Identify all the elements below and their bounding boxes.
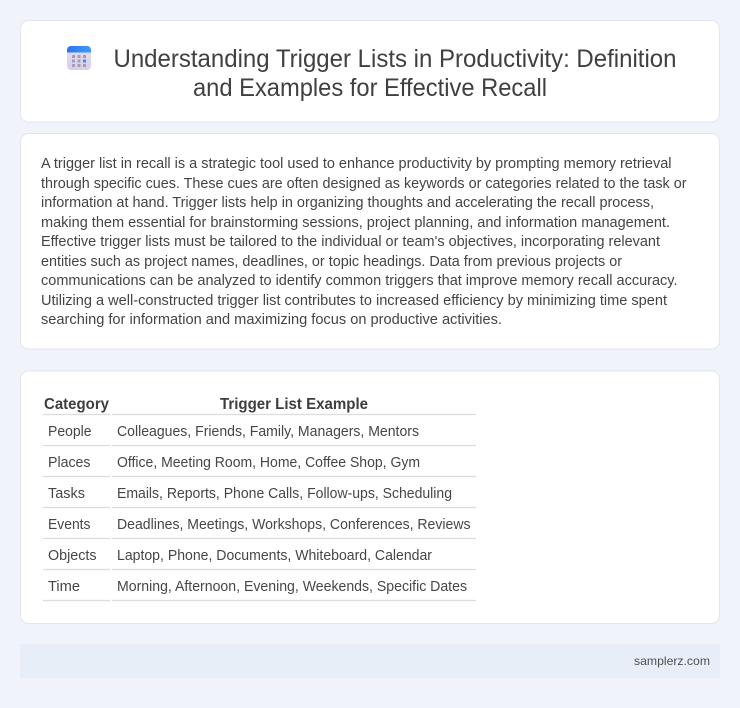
row: Tasks: Emails, Reports, Phone Calls, Follow-ups, Scheduling — [117, 486, 452, 502]
row: Places — [43, 455, 476, 476]
icon: calendar — [67, 46, 91, 70]
footer bar: samplerz.com — [634, 654, 710, 668]
row: People — [43, 424, 476, 446]
description text: communications can be analyzed to identify common triggers that improve memory recall accuracy. — [41, 273, 678, 289]
row: People: Colleagues, Friends, Family, Managers, Mentors — [117, 424, 419, 440]
table header: Trigger List Example — [220, 396, 368, 413]
panel: table card — [20, 371, 720, 624]
panel: description — [20, 134, 720, 349]
row: Places: Office, Meeting Room, Home, Coffee Shop, Gym — [117, 455, 420, 471]
table header: Category — [44, 396, 109, 413]
title: and Examples for Effective Recall — [193, 74, 547, 102]
title — [114, 45, 676, 102]
footer bar — [20, 644, 720, 678]
description text: Utilizing a well-constructed trigger list contributes to increased efficiency by minimizing time spent — [41, 293, 667, 309]
description text: making them essential for brainstorming sessions, project planning, and information management. — [41, 215, 670, 231]
description text: entities such as project names, deadlines, or topic headings. Data from previous projects or — [41, 254, 622, 270]
panel: header — [20, 20, 720, 122]
description text: information at hand. Trigger lists help in organizing thoughts and accelerating the recall process, — [41, 195, 654, 211]
table: trigger list examples — [43, 396, 476, 600]
row: Tasks: Tasks — [48, 486, 85, 502]
description text: searching for information and maximizing focus on productive activities. — [41, 312, 502, 328]
row: People: People — [48, 424, 92, 440]
description text: A trigger list in recall is a strategic tool used to enhance productivity by prompting memory retrieval — [41, 156, 672, 172]
table header — [43, 396, 476, 414]
row: Places: Places — [48, 455, 90, 471]
description text: Effective trigger lists must be tailored to the individual or team's objectives, incorporating relevant — [41, 234, 660, 250]
row: Time: Time — [48, 579, 80, 595]
row: Time — [43, 579, 476, 600]
row: Events: Events — [48, 517, 90, 533]
description text — [41, 156, 687, 328]
row: Objects: Objects — [48, 548, 96, 564]
description text: through specific cues. These cues are often designed as keywords or categories related to the task or — [41, 176, 687, 192]
title: Understanding Trigger Lists in Productivity: Definition — [114, 45, 676, 73]
row: Tasks — [43, 486, 476, 508]
row: Objects — [43, 548, 476, 570]
row: Events: Deadlines, Meetings, Workshops, Conferences, Reviews — [117, 517, 470, 533]
row: Time: Morning, Afternoon, Evening, Weekends, Specific Dates — [117, 579, 467, 595]
row: Events — [43, 517, 476, 538]
row: Objects: Laptop, Phone, Documents, Whiteboard, Calendar — [117, 548, 432, 564]
